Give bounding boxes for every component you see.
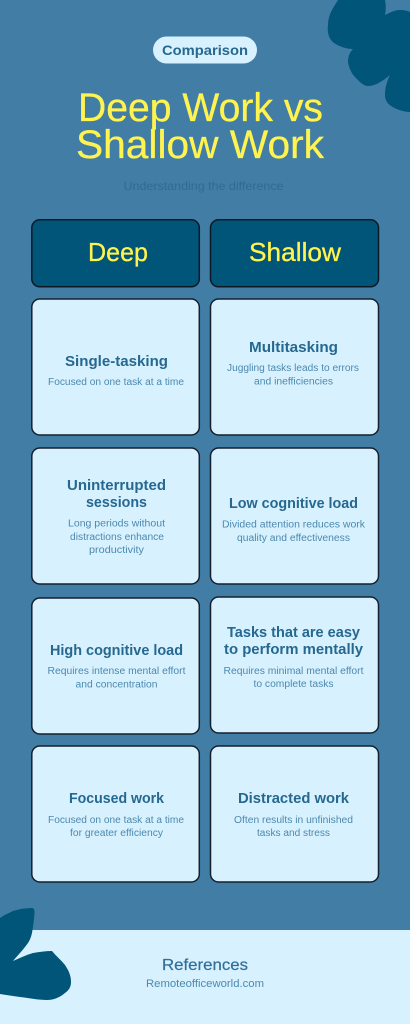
card: Low cognitive load: Low cognitive load [229,495,358,512]
card: High cognitive load [32,598,199,734]
title: Shallow Work [76,123,325,167]
card: Uninterrupted sessions: distractions enhance [70,532,164,543]
tag: Comparison [153,36,257,64]
card: Distracted work: Distracted work [238,790,350,807]
card: Multitasking [210,299,378,435]
card: Distracted work: Often results in unfinished [234,815,353,826]
title [76,86,325,167]
card: Focused work: for greater efficiency [70,828,163,839]
card: Low cognitive load [210,448,378,584]
card: High cognitive load: High cognitive load [50,642,183,659]
card: Multitasking: and inefficiencies [254,376,333,388]
card: Tasks that are easy to perform mentally: to perform mentally [224,641,364,658]
column header: Shallow: Shallow [249,237,341,267]
card: Single-tasking [32,299,199,435]
card: Focused work: Focused on one task at a time [48,815,184,826]
subtitle: Understanding the difference [124,179,284,193]
card: Focused work [32,746,199,882]
card: Low cognitive load: Divided attention reduces work [222,520,366,530]
card: Tasks that are easy to perform mentally: Tasks that are easy [227,624,361,641]
decorative blob: bottom left [0,908,71,1000]
card: Distracted work: tasks and stress [257,828,330,839]
card: Tasks that are easy to perform mentally [210,597,378,733]
card: Uninterrupted sessions: Uninterrupted [67,477,166,494]
footer band [0,930,410,1024]
decorative blob: top right [328,0,410,112]
card: High cognitive load: Requires intense mental effort [48,666,186,677]
card: Single-tasking: Focused on one task at a time [48,377,184,388]
card: Multitasking: Multitasking [249,339,338,356]
card: Tasks that are easy to perform mentally: to complete tasks [254,679,334,690]
tag: Comparison: Comparison [162,42,248,58]
references source: Remoteofficeworld.com [146,978,264,990]
card: Uninterrupted sessions: sessions [86,494,147,511]
column header: Deep [32,220,199,287]
card: Uninterrupted sessions: productivity [89,545,144,556]
card: Single-tasking: Single-tasking [65,353,168,370]
column header: Deep: Deep [88,237,148,267]
references heading: References [162,957,248,974]
card: Uninterrupted sessions [32,448,199,584]
card: Low cognitive load: quality and effectiveness [237,533,350,544]
card: Uninterrupted sessions: Long periods without [68,518,165,530]
card: Multitasking: Juggling tasks leads to errors [227,363,359,374]
title: Deep Work vs [78,86,323,130]
card: Tasks that are easy to perform mentally: Requires minimal mental effort [224,666,364,677]
card: Focused work: Focused work [69,790,165,807]
card: Distracted work [210,746,378,882]
card: High cognitive load: and concentration [76,680,158,690]
column header: Shallow [210,220,378,287]
